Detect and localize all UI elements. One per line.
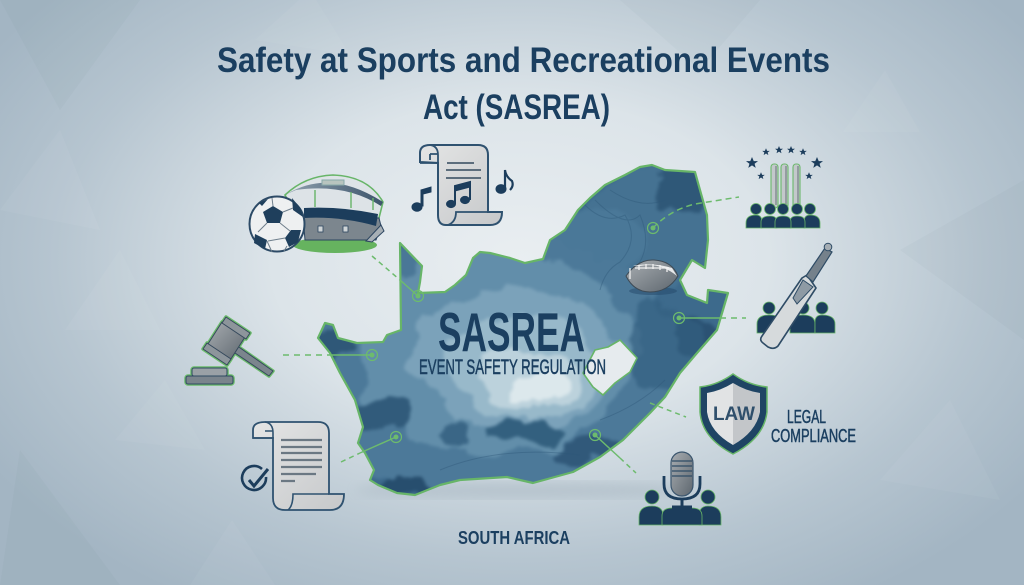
icon: document with check mark <box>242 422 344 510</box>
note: right <box>496 170 513 193</box>
map heading: SASREA <box>438 301 585 363</box>
icon: microphone and crowd <box>639 452 721 525</box>
legal compliance label: COMPLIANCE <box>771 426 856 446</box>
Lesotho cut-out <box>583 340 637 395</box>
title <box>217 41 830 127</box>
icon: music scroll <box>412 145 513 225</box>
connector lines <box>283 197 746 473</box>
icon: stadium and soccer ball <box>250 175 384 253</box>
legal compliance label: LEGAL <box>787 407 826 427</box>
title: Safety at Sports and Recreational Events <box>217 41 830 80</box>
legal compliance label <box>771 407 856 446</box>
shield label: LAW <box>713 404 755 425</box>
map: South Africa <box>316 164 730 499</box>
note: centre <box>446 182 470 208</box>
icon: cricket stumps, stars and crowd <box>746 146 823 228</box>
football on map <box>626 260 678 295</box>
note: left <box>412 187 431 211</box>
soccer ball <box>250 196 304 252</box>
icon: law shield <box>700 374 767 454</box>
icon: cricket bat and crowd <box>757 243 835 348</box>
footer label: South Africa: SOUTH AFRICA <box>458 528 570 548</box>
title: Act (SASREA) <box>423 88 610 127</box>
icon: gavel <box>186 317 273 384</box>
map subheading: EVENT SAFETY REGULATION <box>419 356 606 379</box>
check mark <box>242 466 268 490</box>
